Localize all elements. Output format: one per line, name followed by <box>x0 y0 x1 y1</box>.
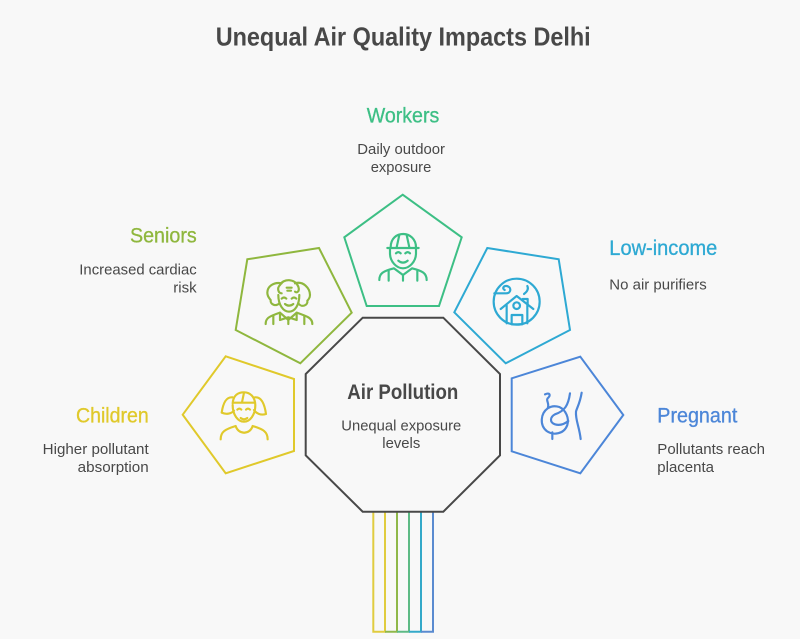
seniors description: Increased cardiac <box>79 261 197 278</box>
seniors description: risk <box>173 279 197 296</box>
panel: seniors pentagon <box>236 248 352 363</box>
pregnant description: Pollutants reach <box>657 441 765 458</box>
text block: low-income <box>609 237 717 293</box>
icon: senior with curly hair <box>266 280 312 324</box>
children description: Higher pollutant <box>43 441 150 458</box>
children outline <box>183 356 294 473</box>
pregnant outline <box>512 357 623 473</box>
children heading: Children <box>76 405 149 428</box>
children description: absorption <box>78 459 149 476</box>
text block: pregnant <box>657 405 765 476</box>
panel: central hub Air Pollution <box>306 318 500 512</box>
workers description: exposure <box>371 159 431 176</box>
low-income description: No air purifiers <box>609 276 707 293</box>
hub description: levels <box>382 435 420 452</box>
text block: children <box>43 405 150 476</box>
seniors heading: Seniors <box>130 225 197 248</box>
workers description: Daily outdoor <box>357 141 445 158</box>
icon: house in polluted air circle <box>494 279 540 325</box>
panel: children pentagon <box>183 356 294 473</box>
seniors outline <box>236 248 352 363</box>
text block: seniors <box>79 225 197 296</box>
text block: workers <box>357 105 445 176</box>
icon: pregnant body profile <box>542 393 582 439</box>
hub heading: Air Pollution <box>347 381 458 404</box>
connector stripes below the hub <box>373 512 433 632</box>
low-income outline <box>454 248 570 363</box>
icon: worker with hard hat <box>379 234 427 281</box>
workers heading: Workers <box>367 105 439 128</box>
title: Unequal Air Quality Impacts Delhi <box>216 22 591 52</box>
hub description: Unequal exposure <box>341 418 461 434</box>
workers outline <box>344 195 462 306</box>
panel: workers pentagon <box>344 195 462 306</box>
pregnant heading: Pregnant <box>657 405 737 428</box>
icon: child with pigtails <box>221 392 268 439</box>
pregnant description: placenta <box>657 459 715 476</box>
panel: low-income pentagon <box>454 248 570 363</box>
hub octagon <box>306 318 500 512</box>
panel: pregnant pentagon <box>512 357 623 473</box>
low-income heading: Low-income <box>609 237 717 260</box>
